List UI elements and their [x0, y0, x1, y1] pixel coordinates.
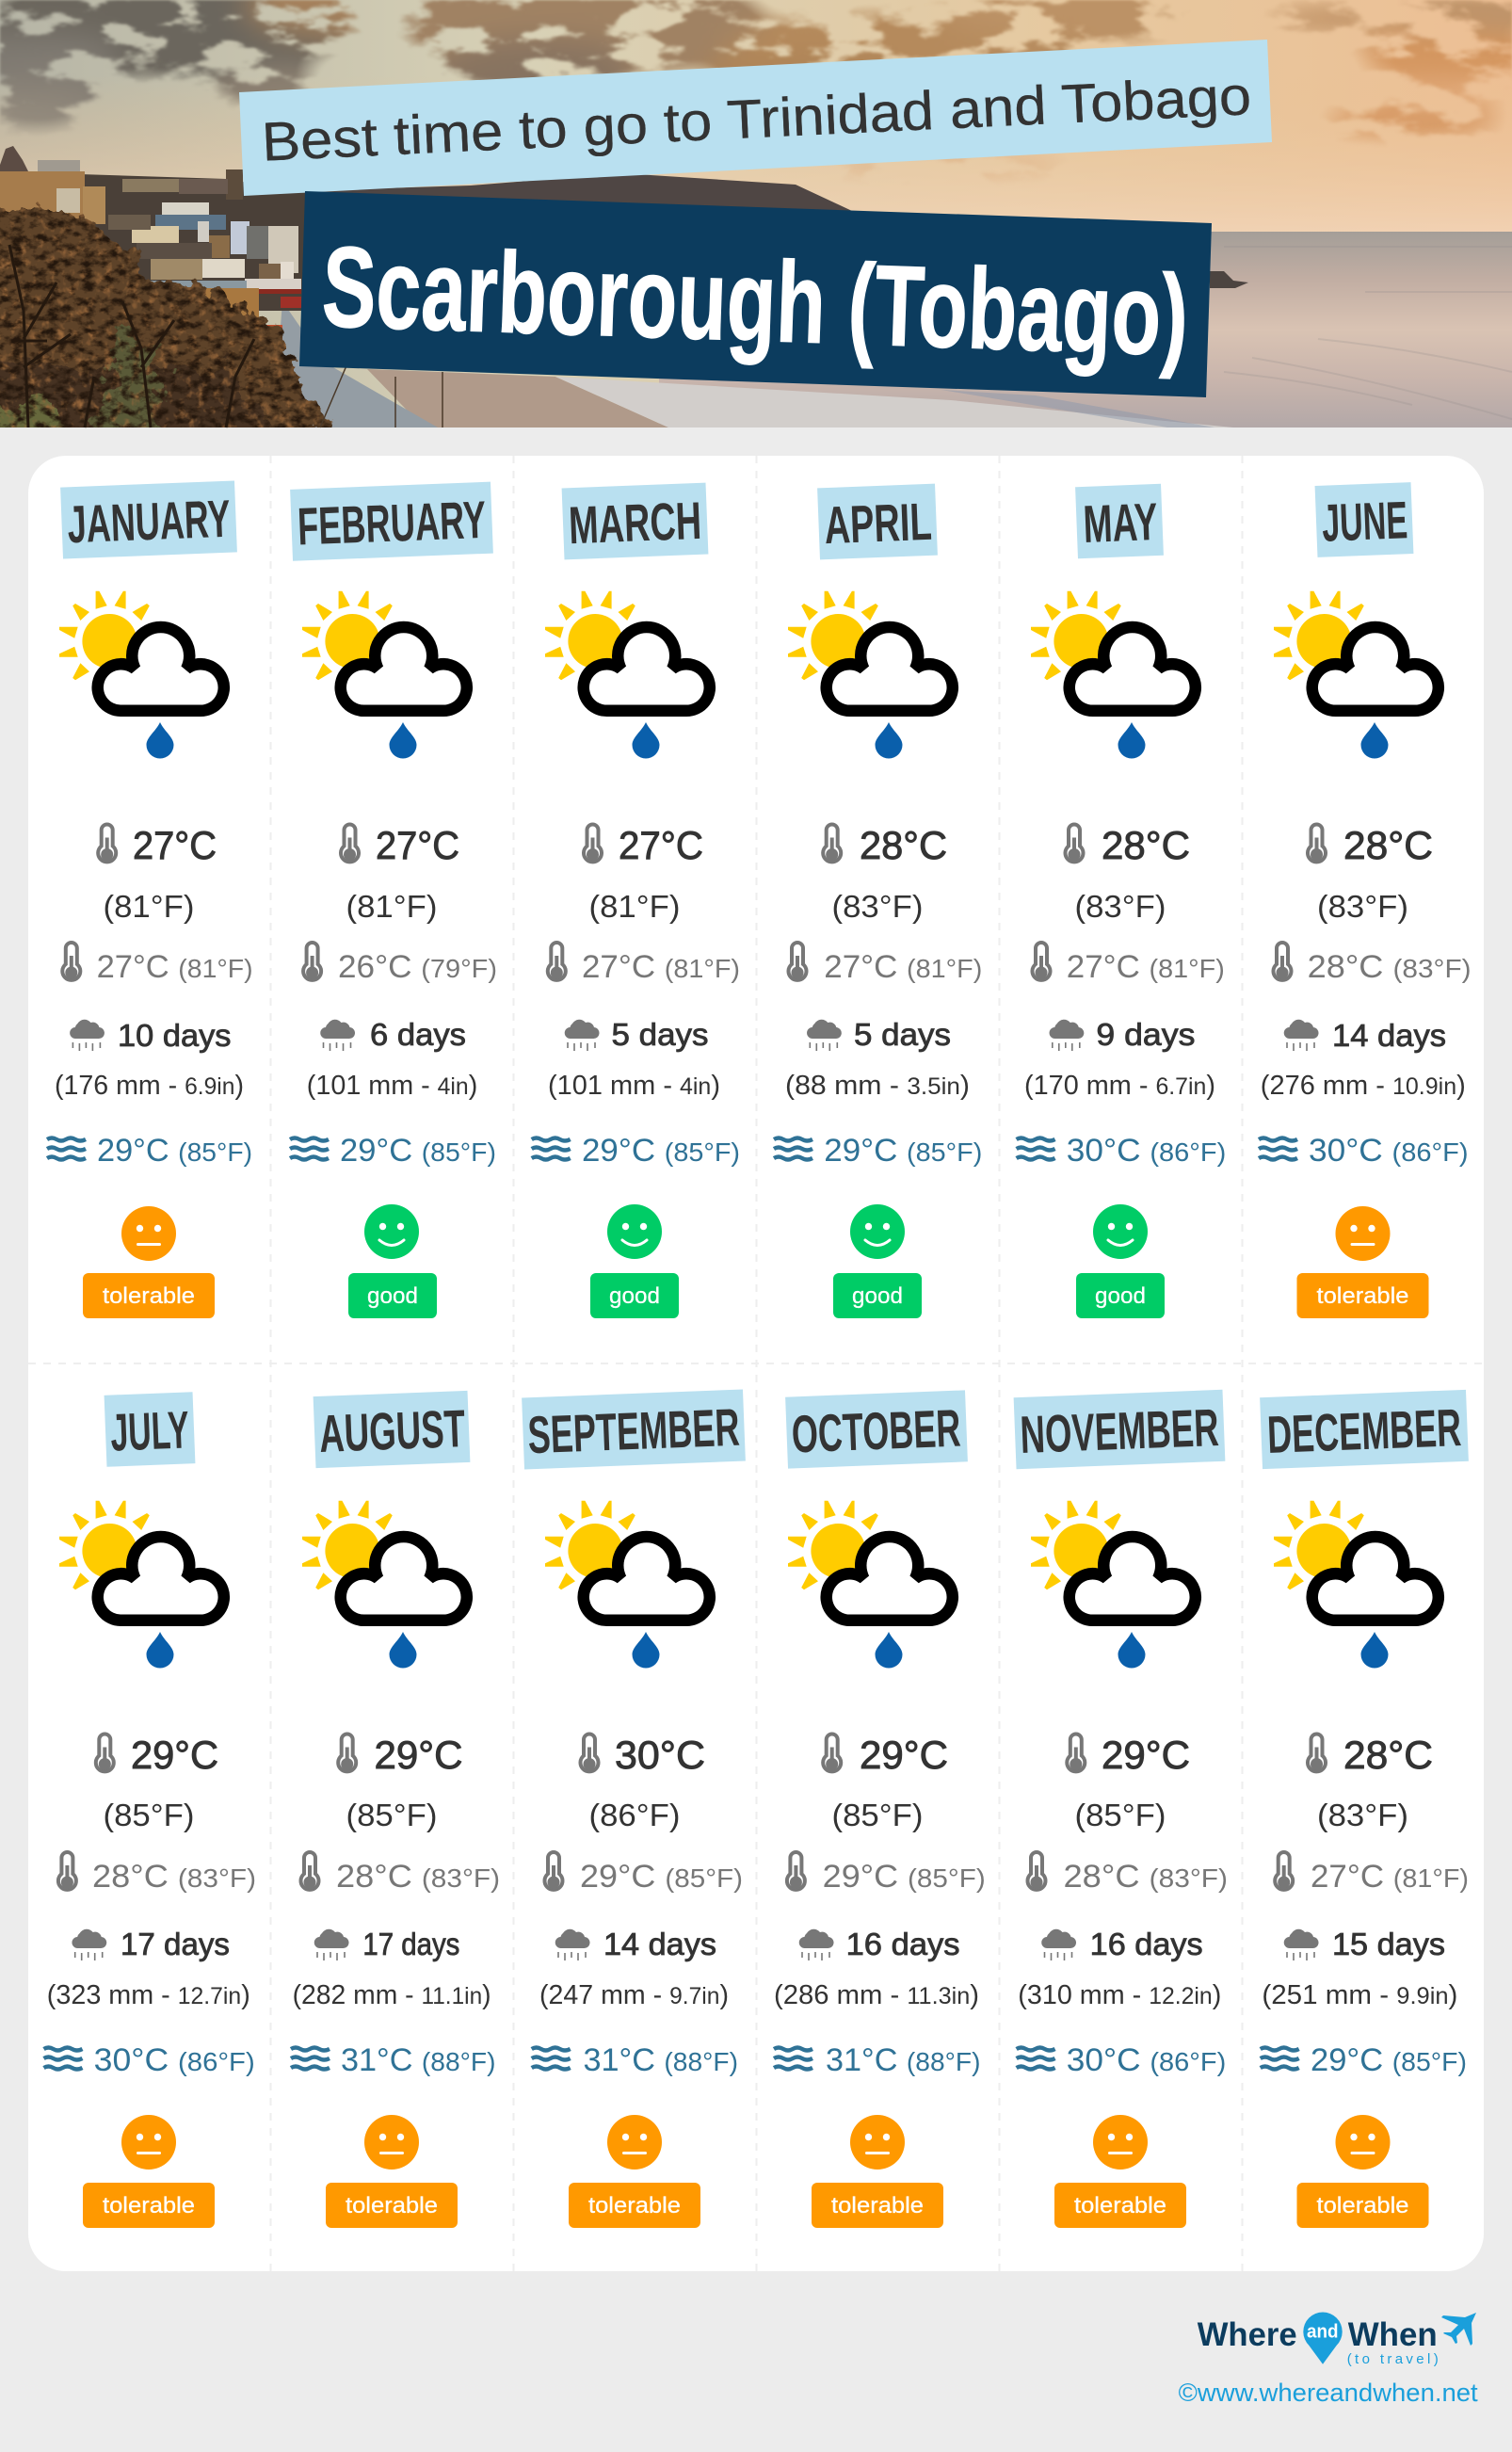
high temperature icon — [584, 825, 602, 862]
rain icon — [1284, 1929, 1319, 1960]
panel: October — [774, 1390, 986, 2228]
high temperature: 29°C — [131, 1733, 218, 1777]
rain icon — [1050, 1020, 1084, 1051]
sea icon — [43, 2047, 83, 2070]
logo: Where and When — [1198, 2313, 1476, 2367]
month label — [522, 1390, 746, 1469]
high temperature icon — [1066, 825, 1083, 862]
month label — [314, 1391, 470, 1468]
rating badge: good — [1095, 1283, 1146, 1309]
high temperature: 28°C — [1343, 823, 1433, 867]
face icon — [121, 1206, 176, 1261]
sea temperature: 31°C (88°F) — [584, 2042, 738, 2078]
rating badge — [590, 1273, 679, 1318]
high temperature icon — [338, 1734, 356, 1771]
low temperature: 27°C (81°F) — [824, 949, 982, 985]
weather icon — [1274, 1501, 1439, 1669]
panel: June — [1259, 482, 1472, 1318]
weather icon — [545, 1501, 710, 1669]
high temperature icon — [98, 825, 116, 862]
rain icon — [807, 1020, 842, 1051]
low temperature: 28°C (83°F) — [92, 1859, 256, 1895]
rainfall: (88 mm - 3.5in) — [785, 1071, 970, 1101]
rainy days: 17 days — [121, 1927, 230, 1961]
panel: February — [290, 482, 497, 1318]
month label: MARCH — [568, 491, 702, 555]
high temperature icon — [823, 825, 841, 862]
rating badge — [1297, 2183, 1429, 2228]
icon: airplane — [1441, 2313, 1476, 2346]
face icon — [364, 1204, 419, 1259]
weather icon — [1274, 591, 1439, 759]
rainfall: (251 mm - 9.9in) — [1262, 1980, 1457, 2010]
face icon — [850, 2115, 905, 2170]
low temperature: 28°C (83°F) — [336, 1859, 500, 1895]
panel: November — [1014, 1390, 1228, 2228]
high fahrenheit: (85°F) — [104, 1798, 194, 1832]
high fahrenheit: (83°F) — [1075, 889, 1166, 924]
low temperature: 29°C (85°F) — [823, 1859, 986, 1895]
rainy days: 5 days — [612, 1017, 708, 1052]
rating badge — [812, 2183, 943, 2228]
month label — [1014, 1390, 1225, 1469]
rainfall: (247 mm - 9.7in) — [539, 1980, 729, 2010]
high fahrenheit: (81°F) — [346, 889, 437, 924]
month label — [105, 1392, 195, 1467]
face icon — [1093, 2115, 1148, 2170]
sea icon — [1017, 1137, 1055, 1160]
panel: December — [1260, 1390, 1469, 2228]
rating badge: tolerable — [1074, 2193, 1166, 2218]
month label: SEPTEMBER — [526, 1397, 741, 1464]
sea temperature: 30°C (86°F) — [1067, 1133, 1226, 1169]
panel: January — [47, 480, 253, 1318]
rainfall: (323 mm - 12.7in) — [47, 1980, 250, 2010]
rainfall: (276 mm - 10.9in) — [1261, 1071, 1466, 1101]
sea temperature: 29°C (85°F) — [824, 1133, 982, 1169]
month label — [1075, 484, 1164, 558]
rating badge — [1076, 1273, 1165, 1318]
rainy days: 6 days — [370, 1017, 466, 1052]
high fahrenheit: (81°F) — [104, 889, 194, 924]
month label: JUNE — [1321, 490, 1408, 553]
rain icon — [70, 1020, 105, 1051]
high temperature: 27°C — [619, 823, 703, 867]
rainy days: 14 days — [1332, 1018, 1446, 1053]
sea icon — [774, 2047, 812, 2070]
face icon — [121, 2115, 176, 2170]
low temperature icon — [1028, 1852, 1045, 1890]
sea temperature: 30°C (86°F) — [94, 2042, 255, 2078]
high temperature: 27°C — [133, 823, 217, 867]
high temperature: 28°C — [860, 823, 947, 867]
rainfall: (286 mm - 11.3in) — [774, 1980, 979, 2010]
rain icon — [320, 1020, 355, 1051]
month label — [1315, 482, 1413, 557]
low temperature icon — [1275, 1852, 1293, 1890]
month label — [562, 483, 708, 559]
rating badge: good — [609, 1283, 660, 1309]
low temperature icon — [301, 1852, 318, 1890]
sea icon — [532, 2047, 571, 2070]
weather icon — [1031, 591, 1196, 759]
rain icon — [314, 1929, 349, 1960]
rain icon — [555, 1929, 590, 1960]
rainy days: 14 days — [603, 1927, 716, 1961]
logo: Where and When: When — [1348, 2316, 1438, 2353]
subtitle text: Best time to go to Trinidad and Tobago — [261, 65, 1252, 173]
sea temperature: 29°C (85°F) — [1311, 2042, 1467, 2078]
rainy days: 15 days — [1332, 1927, 1445, 1961]
rainy days: 5 days — [854, 1017, 951, 1052]
rainfall: (176 mm - 6.9in) — [55, 1071, 244, 1101]
rating badge — [833, 1273, 922, 1318]
high temperature: 29°C — [860, 1733, 948, 1777]
low temperature: 26°C (79°F) — [338, 949, 497, 985]
weather icon — [545, 591, 710, 759]
month label: AUGUST — [318, 1398, 466, 1463]
rainy days: 10 days — [118, 1018, 232, 1053]
sea temperature: 31°C (88°F) — [341, 2042, 495, 2078]
high temperature: 29°C — [375, 1733, 463, 1777]
low temperature: 29°C (85°F) — [580, 1859, 743, 1895]
face icon — [1335, 1206, 1390, 1261]
month label: NOVEMBER — [1019, 1397, 1220, 1464]
rating badge: good — [852, 1283, 903, 1309]
rating badge — [326, 2183, 458, 2228]
month label — [785, 1390, 968, 1469]
sea temperature: 29°C (85°F) — [582, 1133, 740, 1169]
low temperature icon — [789, 943, 806, 980]
rainfall: (101 mm - 4in) — [548, 1071, 720, 1101]
panel: August — [291, 1391, 500, 2228]
weather icon — [1031, 1501, 1196, 1669]
month label: OCTOBER — [791, 1398, 961, 1463]
rain icon — [1284, 1020, 1319, 1051]
high fahrenheit: (86°F) — [589, 1798, 680, 1832]
sea icon — [47, 1137, 86, 1160]
subtitle ribbon — [239, 40, 1272, 196]
sea icon — [291, 2047, 330, 2070]
face icon — [607, 2115, 662, 2170]
month label: JULY — [109, 1399, 190, 1462]
face icon — [607, 1204, 662, 1259]
sea temperature: 31°C (88°F) — [826, 2042, 981, 2078]
sea icon — [290, 1137, 329, 1160]
weather icon — [59, 1501, 224, 1669]
logo: Where and When: Where — [1198, 2316, 1297, 2353]
rating badge: tolerable — [831, 2193, 924, 2218]
rain icon — [799, 1929, 834, 1960]
rainfall: (310 mm - 12.2in) — [1018, 1980, 1221, 2010]
month label: FEBRUARY — [297, 490, 487, 557]
high temperature icon — [1308, 1734, 1326, 1771]
rating badge: good — [367, 1283, 418, 1309]
rating badge — [348, 1273, 437, 1318]
high fahrenheit: (85°F) — [346, 1798, 437, 1832]
rainy days: 16 days — [846, 1927, 960, 1961]
sea temperature: 30°C (86°F) — [1067, 2042, 1226, 2078]
high temperature: 27°C — [376, 823, 459, 867]
low temperature icon — [544, 1852, 563, 1890]
rainy days: 9 days — [1096, 1017, 1195, 1052]
rain icon — [565, 1020, 600, 1051]
sea icon — [1261, 2047, 1299, 2070]
high fahrenheit: (85°F) — [832, 1798, 923, 1832]
low temperature icon — [787, 1852, 805, 1890]
low temperature: 27°C (81°F) — [97, 949, 253, 985]
panel: May — [1017, 484, 1226, 1318]
weather icon — [788, 591, 953, 759]
weather icon — [302, 1501, 467, 1669]
sea icon — [1017, 2047, 1055, 2070]
high fahrenheit: (81°F) — [589, 889, 680, 924]
rating badge — [83, 2183, 215, 2228]
rating badge: tolerable — [588, 2193, 681, 2218]
low temperature icon — [548, 943, 566, 980]
month label — [290, 482, 493, 561]
high temperature: 28°C — [1343, 1733, 1433, 1777]
high temperature icon — [580, 1734, 599, 1771]
sea temperature: 29°C (85°F) — [340, 1133, 496, 1169]
month label — [817, 484, 938, 559]
month label: MAY — [1082, 492, 1159, 554]
high temperature: 30°C — [615, 1733, 705, 1777]
panel: July — [43, 1392, 256, 2228]
rating badge: tolerable — [1316, 1283, 1408, 1309]
month label: JANUARY — [66, 489, 232, 554]
high temperature icon — [96, 1734, 114, 1771]
icon: map pin — [1303, 2313, 1343, 2364]
sea temperature: 30°C (86°F) — [1309, 1133, 1469, 1169]
high fahrenheit: (83°F) — [1317, 1798, 1408, 1832]
low temperature icon — [1273, 943, 1292, 980]
month label — [60, 480, 237, 559]
high fahrenheit: (83°F) — [832, 889, 923, 924]
logo: Where and When: (to travel) — [1347, 2351, 1439, 2367]
month label: APRIL — [823, 492, 933, 555]
low temperature icon — [303, 943, 321, 980]
website credit: ©www.whereandwhen.net — [1179, 2379, 1478, 2407]
high fahrenheit: (85°F) — [1075, 1798, 1166, 1832]
rating badge — [83, 1273, 215, 1318]
face icon — [1093, 1204, 1148, 1259]
weather icon — [788, 1501, 953, 1669]
high temperature icon — [341, 825, 359, 862]
low temperature icon — [58, 1852, 76, 1890]
panel: March — [532, 483, 740, 1318]
rating badge — [1297, 1273, 1429, 1318]
face icon — [1335, 2115, 1390, 2170]
rainy days: 16 days — [1090, 1927, 1203, 1961]
calendar card — [28, 456, 1484, 2271]
low temperature icon — [62, 943, 80, 980]
rating badge: tolerable — [103, 2193, 195, 2218]
rating badge: tolerable — [346, 2193, 438, 2218]
title ribbon — [299, 191, 1212, 397]
high temperature: 29°C — [1102, 1733, 1190, 1777]
sea icon — [532, 1137, 571, 1160]
low temperature: 27°C (81°F) — [1311, 1859, 1469, 1895]
rainfall: (282 mm - 11.1in) — [293, 1980, 491, 2010]
sea icon — [1259, 1137, 1297, 1160]
high temperature icon — [823, 1734, 841, 1771]
low temperature: 28°C (83°F) — [1064, 1859, 1228, 1895]
high temperature: 28°C — [1102, 823, 1190, 867]
rain icon — [72, 1929, 106, 1960]
face icon — [364, 2115, 419, 2170]
sea temperature: 29°C (85°F) — [97, 1133, 252, 1169]
low temperature: 28°C (83°F) — [1308, 949, 1472, 985]
logo: Where and When: and — [1307, 2322, 1339, 2343]
panel: September — [522, 1390, 746, 2228]
rainfall: (170 mm - 6.7in) — [1024, 1071, 1215, 1101]
rating badge — [1054, 2183, 1186, 2228]
panel: April — [774, 484, 982, 1318]
high temperature icon — [1308, 825, 1326, 862]
rating badge: tolerable — [1316, 2193, 1408, 2218]
rating badge: tolerable — [103, 1283, 195, 1309]
high fahrenheit: (83°F) — [1317, 889, 1408, 924]
rainy days: 17 days — [362, 1927, 459, 1961]
header photo: seaside town at sunset — [0, 0, 1512, 452]
weather icon — [302, 591, 467, 759]
face icon — [850, 1204, 905, 1259]
rating badge — [569, 2183, 700, 2228]
low temperature: 27°C (81°F) — [582, 949, 740, 985]
sea icon — [774, 1137, 812, 1160]
rainfall: (101 mm - 4in) — [307, 1071, 477, 1101]
rain icon — [1041, 1929, 1076, 1960]
weather icon — [59, 591, 224, 759]
low temperature: 27°C (81°F) — [1067, 949, 1225, 985]
low temperature icon — [1032, 943, 1051, 980]
high temperature icon — [1067, 1734, 1085, 1771]
